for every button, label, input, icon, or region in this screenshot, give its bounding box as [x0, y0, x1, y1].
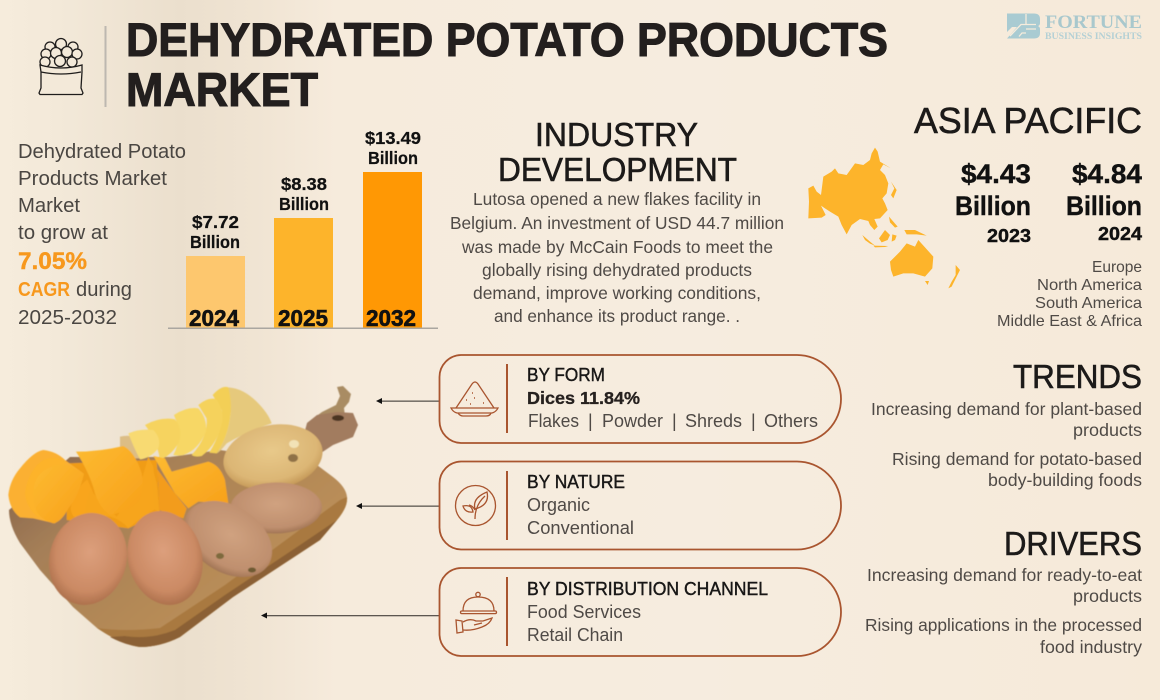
text block: industry development — [450, 189, 784, 326]
panel: by form: BY FORM — [527, 365, 605, 385]
text block: industry development: Belgium. An investment of USD 44.7 million — [450, 213, 784, 233]
text block: industry development: and enhance its product range. . — [494, 306, 740, 326]
red potato left — [39, 504, 137, 614]
bar chart: market size: $8.38 — [281, 174, 327, 194]
text block: market growth summary: 2025-2032 — [18, 307, 117, 329]
bar chart: market size: 2024 — [189, 305, 239, 331]
text block: market growth summary — [18, 141, 186, 329]
stats: Asia Pacific market values: Billion — [955, 191, 1031, 221]
panel: by form: | — [751, 411, 756, 431]
panel: by distribution channel: BY DISTRIBUTION CHANNEL — [527, 579, 768, 599]
red potato right — [170, 485, 286, 593]
drivers: Rising applications in the processed — [865, 615, 1142, 635]
logo: Fortune Business Insights: FORTUNE — [1045, 12, 1142, 33]
bar chart: market size: Billion — [279, 194, 329, 214]
title: DEHYDRATED POTATO PRODUCTS — [126, 13, 888, 66]
stats: Asia Pacific market values: 2023 — [987, 225, 1031, 246]
text block: other regions: North America — [1037, 277, 1142, 294]
arrow: by form — [376, 398, 440, 404]
text block: market growth summary: during — [76, 279, 132, 301]
trends: TRENDS — [1013, 358, 1142, 395]
heading: industry development — [498, 116, 737, 188]
panel: by distribution channel — [440, 568, 841, 656]
text block: industry development: Lutosa opened a new flakes facility in — [473, 189, 761, 209]
trends: Rising demand for potato-based — [892, 449, 1142, 469]
board front edge — [97, 497, 347, 647]
text block: market growth summary: 7.05% — [18, 248, 87, 275]
panel: by form: Others — [764, 411, 818, 431]
drivers: products — [1073, 586, 1142, 606]
icon: cloche on hand — [456, 592, 496, 633]
logo: Fortune Business Insights — [1007, 12, 1142, 41]
bar chart: market size — [168, 128, 438, 331]
text block: other regions — [997, 259, 1142, 330]
red potato centre — [118, 503, 212, 613]
bar chart: market size: Billion — [190, 232, 240, 252]
bar chart: market size: $13.49 — [365, 128, 421, 148]
panel: by nature: BY NATURE — [527, 472, 625, 492]
panel: by form: | — [588, 411, 593, 431]
map: Asia Pacific — [808, 148, 960, 288]
panel: by form: | — [672, 411, 677, 431]
wooden board — [9, 450, 347, 647]
title: MARKET — [126, 63, 318, 116]
heading: Asia Pacific: ASIA PACIFIC — [914, 100, 1142, 141]
text block: industry development: globally rising dehydrated products — [482, 260, 752, 280]
illustration: potatoes and chips on a board — [8, 386, 358, 647]
logo: Fortune Business Insights: BUSINESS INSIGHTS — [1045, 31, 1142, 41]
title — [126, 13, 888, 116]
icon: leaf in circle — [456, 486, 496, 526]
header divider — [104, 26, 106, 107]
trends: products — [1073, 420, 1142, 440]
panel: by nature: Organic — [527, 495, 590, 515]
bar chart: market size: 2032 — [366, 305, 416, 331]
panel: by nature — [440, 462, 841, 550]
panel: by form: Dices 11.84% — [527, 388, 640, 408]
bar chart: market size: 2025 — [278, 305, 328, 331]
board handle — [300, 412, 358, 455]
drivers: DRIVERS — [1004, 525, 1142, 562]
potato slices — [120, 387, 272, 459]
tan potato — [230, 482, 322, 534]
heading: industry development: INDUSTRY — [535, 116, 698, 153]
stats: Asia Pacific market values: $4.43 — [961, 159, 1031, 189]
panel: by form: Shreds — [685, 411, 742, 431]
panel: by form — [440, 355, 841, 443]
panel: by form: Flakes — [528, 411, 579, 431]
icon: powder heap on plate — [451, 382, 498, 416]
text block: market growth summary: Products Market — [18, 168, 167, 190]
stats: Asia Pacific market values — [955, 159, 1143, 246]
text block: industry development: demand, improve working conditions, — [473, 283, 761, 303]
text block: other regions: Middle East & Africa — [997, 313, 1142, 330]
trends: Increasing demand for plant-based — [871, 399, 1142, 419]
bar chart: market size: Billion — [368, 148, 418, 168]
trends — [871, 358, 1142, 490]
stats: Asia Pacific market values: Billion — [1066, 191, 1142, 221]
panel: by distribution channel: Retail Chain — [527, 625, 623, 645]
potato chips — [8, 446, 160, 528]
text block: market growth summary: to grow at — [18, 222, 108, 244]
panel: by nature: Conventional — [527, 518, 634, 538]
text block: other regions: South America — [1035, 295, 1142, 312]
bar chart: market size: $7.72 — [192, 212, 239, 232]
panel: by distribution channel: Food Services — [527, 602, 641, 622]
text block: market growth summary: CAGR — [18, 279, 70, 301]
drivers: food industry — [1040, 637, 1142, 657]
arrow: by nature — [356, 503, 440, 509]
text block: market growth summary: Market — [18, 195, 80, 217]
rope — [307, 386, 351, 423]
drivers — [865, 525, 1142, 657]
stats: Asia Pacific market values: $4.84 — [1072, 159, 1142, 189]
arrow: by distribution channel — [261, 612, 440, 618]
heading: industry development: DEVELOPMENT — [498, 151, 737, 188]
stats: Asia Pacific market values: 2024 — [1098, 223, 1143, 244]
icon: sack of potatoes — [39, 38, 83, 94]
text block: market growth summary: Dehydrated Potato — [18, 141, 186, 163]
text block: industry development: was made by McCain Foods to meet the — [461, 237, 773, 257]
drivers: Increasing demand for ready-to-eat — [867, 565, 1142, 585]
panel: by form: Powder — [602, 411, 663, 431]
trends: body-building foods — [988, 470, 1142, 490]
text block: other regions: Europe — [1092, 259, 1142, 276]
yellow potato — [218, 417, 328, 497]
